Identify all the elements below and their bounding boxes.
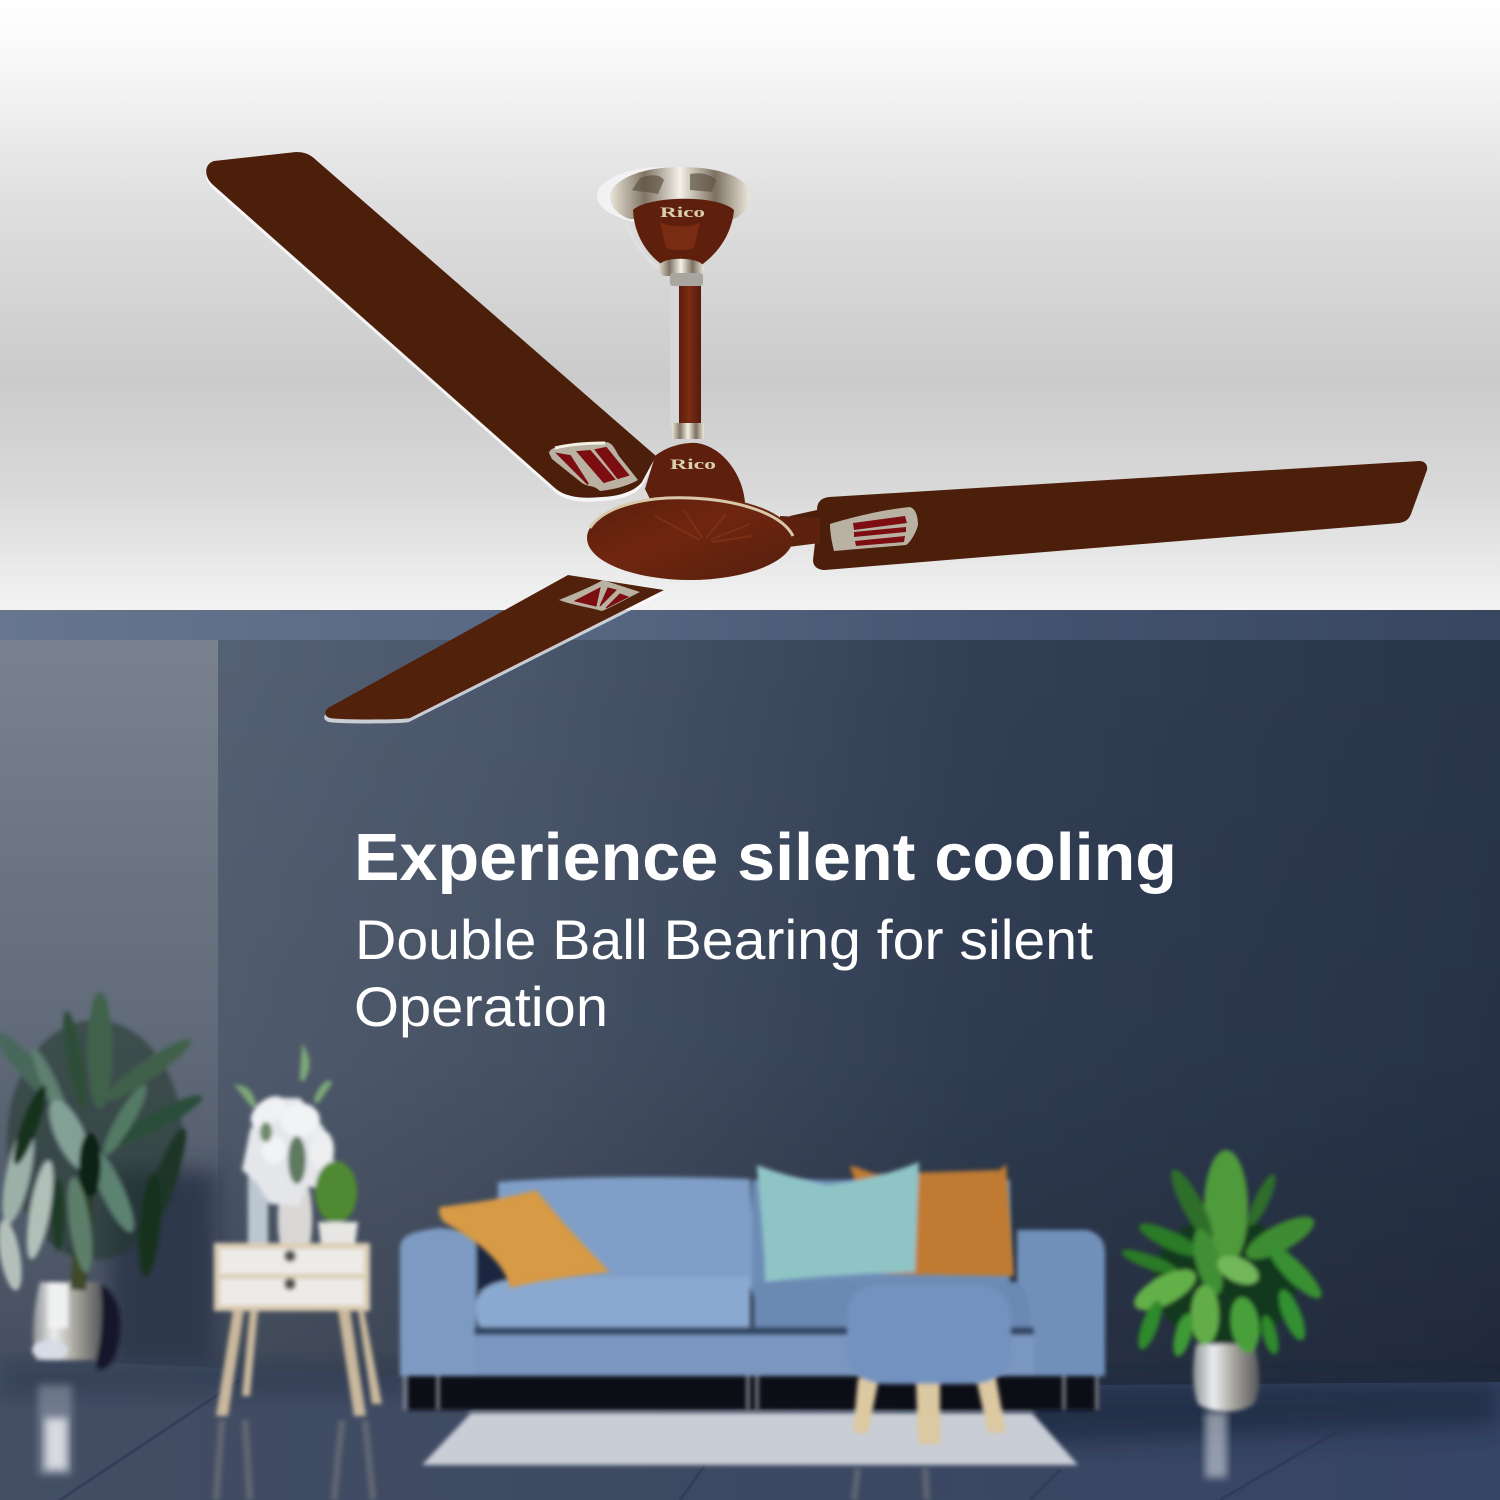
brown bowl [633,199,734,266]
flower vases [240,1052,338,1244]
fan blade: right [790,461,1427,570]
orange cushion back right [850,1164,1014,1276]
chrome dish [610,167,750,219]
room background [0,610,1500,1500]
ceiling plate [597,167,731,225]
under-sofa shadow [408,1368,1098,1410]
fan blade: upper left [206,152,656,502]
dark gap under cushion [474,1240,514,1290]
subheading text [354,908,1093,1038]
cushions [439,1162,1014,1288]
plant foliage [1119,1150,1328,1358]
blade ornament: right [830,507,918,551]
table body [214,1243,370,1311]
chrome collar [658,259,704,276]
side table with vases [214,1052,382,1416]
blade neck [780,516,820,548]
canopy logo: Rico [660,205,705,221]
top canopy [610,167,750,286]
motor body [587,496,793,580]
sofa legs [405,1376,1097,1410]
ottoman legs [853,1378,1006,1444]
left arm [400,1228,476,1376]
teal cushion [757,1162,919,1282]
sofa base [474,1334,1034,1376]
plant foliage [0,992,206,1292]
blade ornament: upper left [549,442,638,491]
plant pot [1193,1344,1259,1412]
heading: Experience silent cooling [354,820,1177,895]
rug [422,1413,1078,1465]
left potted plant [0,992,206,1370]
wall [0,640,1500,1400]
seat cushions [476,1277,1030,1328]
table legs [216,1310,382,1416]
motor dome [645,443,745,509]
ceiling fan [206,152,1427,724]
ceiling background [0,0,1500,612]
cactus pot [315,1161,358,1244]
ottoman seat [847,1284,1011,1384]
sofa back [498,1177,756,1289]
motor logo: Rico [670,457,716,473]
subheading text: Operation [354,975,608,1038]
fan blade: lower [324,575,664,724]
plant pot [32,1282,120,1370]
orange cushion left [439,1190,610,1288]
ottoman [847,1284,1011,1444]
floor [0,1358,1500,1500]
blade ornament: lower [559,580,640,611]
sofa [400,1177,1105,1410]
down rod [670,285,704,439]
sofa shadow and rug [408,1368,1098,1465]
subheading text: Double Ball Bearing for silent [355,908,1093,971]
right arm [1017,1230,1105,1376]
right potted plant [1119,1150,1328,1412]
ceiling edge strip [0,610,1500,640]
